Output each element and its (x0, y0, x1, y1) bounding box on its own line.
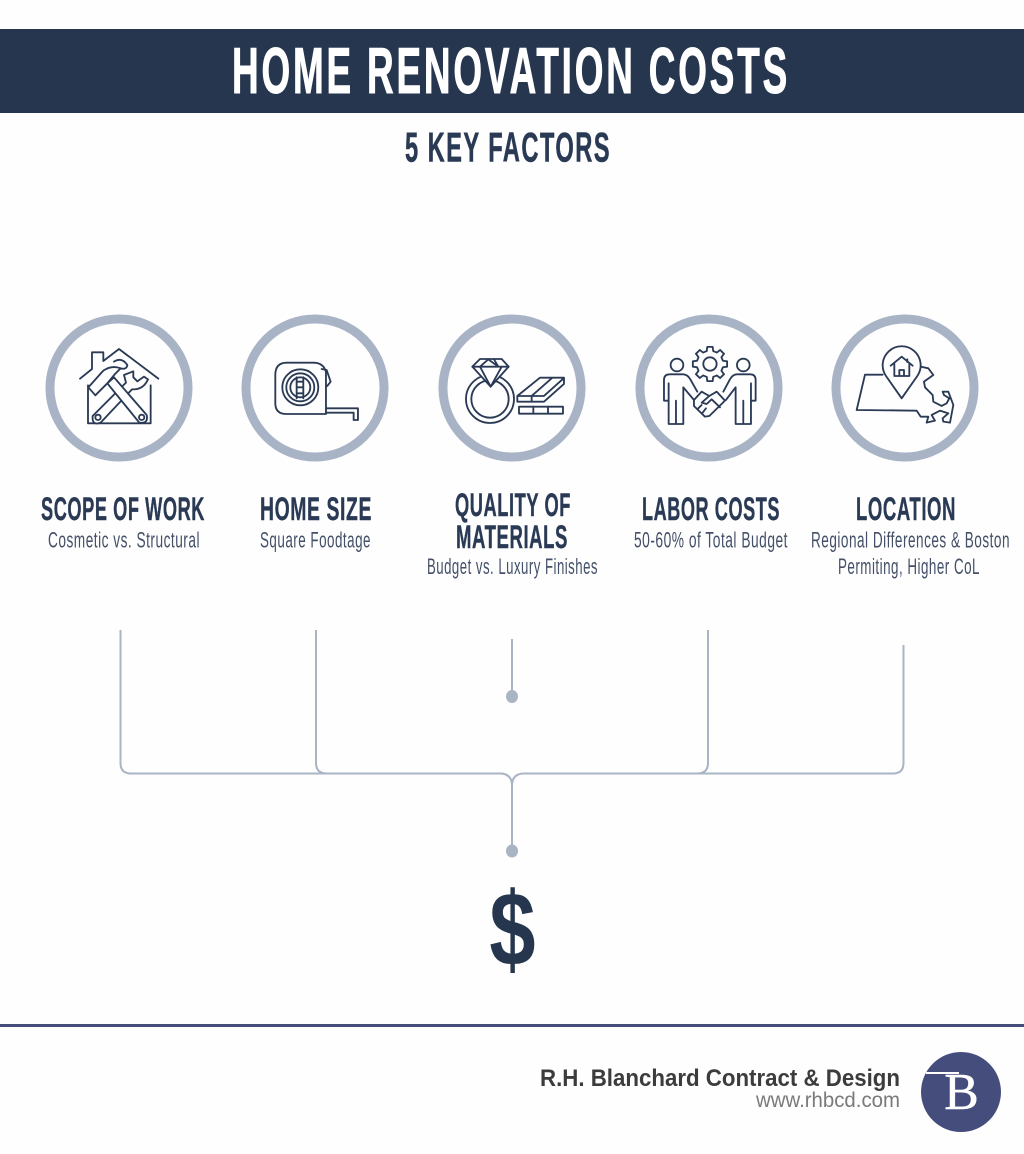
footer website: www.rhbcd.com (755, 1089, 900, 1112)
footer company name: R.H. Blanchard Contract & Design (540, 1065, 900, 1092)
text: regional differences (811, 528, 1010, 579)
subtitle: 5 KEY FACTORS (405, 124, 611, 171)
panel: quality of materials (443, 319, 581, 457)
title banner (0, 29, 1024, 113)
connector lines (120, 630, 904, 858)
panel: home size (246, 319, 384, 457)
footer rule (0, 1024, 1024, 1027)
icon: handshake with gear (664, 347, 756, 424)
panel: labor costs (640, 319, 778, 457)
icon: diamond ring and planks (466, 359, 564, 423)
icon: tape measure (275, 363, 358, 420)
logo badge (921, 1052, 1001, 1132)
icon: house with hammer and wrench (80, 349, 158, 423)
text: budget vs luxury: Budget vs. Luxury Finishes (427, 554, 598, 579)
heading: quality of materials: QUALITY OF (455, 487, 571, 523)
heading: quality of materials (455, 487, 571, 555)
icon: Massachusetts map with pin (857, 346, 953, 423)
heading: scope of work: SCOPE OF WORK (41, 491, 205, 527)
heading: labor costs: LABOR COSTS (642, 491, 780, 527)
text: labor share of budget: 50-60% of Total Budget (634, 528, 788, 552)
text: cosmetic vs structural: Cosmetic vs. Structural (48, 528, 200, 552)
heading: quality of materials: MATERIALS (456, 519, 568, 555)
panel: location (836, 319, 974, 457)
panel: scope of work (50, 319, 188, 457)
logo badge: B (944, 1064, 979, 1121)
text: square footage: Square Foodtage (260, 528, 371, 552)
heading: location: LOCATION (856, 491, 956, 527)
heading: home size: HOME SIZE (260, 491, 372, 527)
icon: dollar sign: $ (489, 871, 536, 988)
